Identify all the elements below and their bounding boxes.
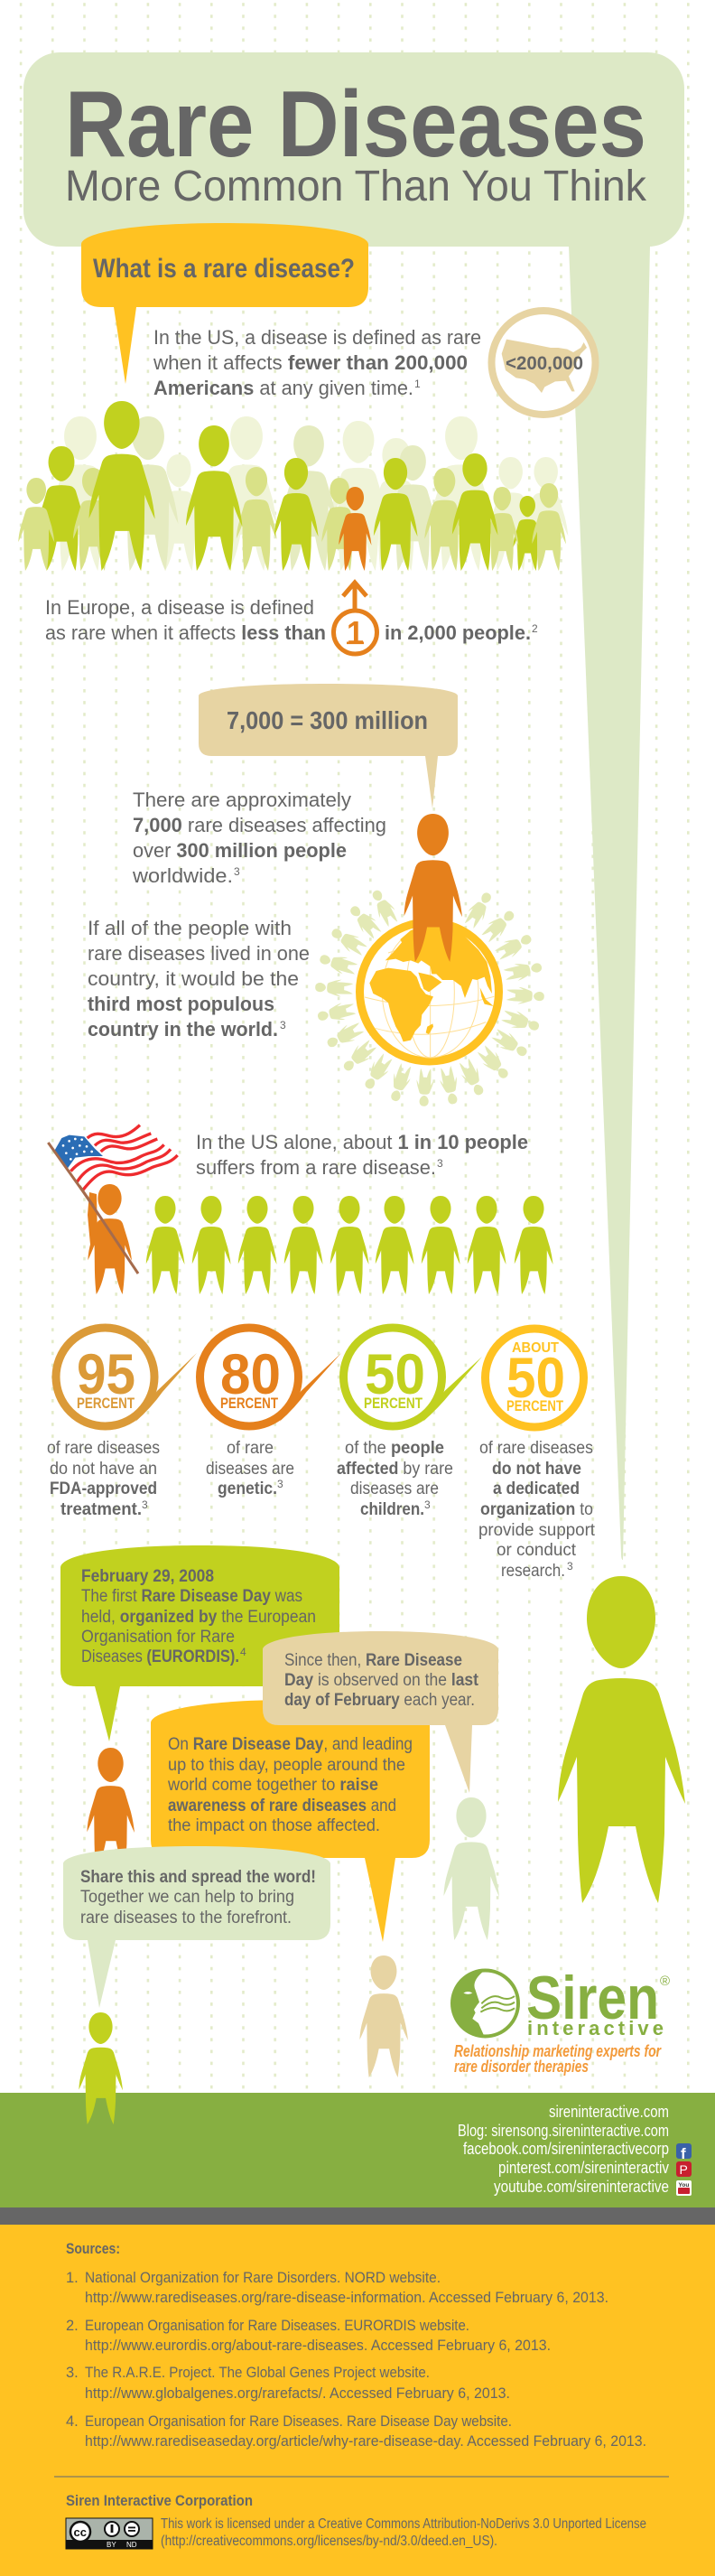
organization name: Siren Interactive Corporation: [66, 2493, 253, 2509]
callout: share this: Together we can help to bring: [80, 1888, 294, 1907]
stat: 50 percent: diseases are: [350, 1479, 439, 1498]
contact links: facebook.com/sireninteractivecorp: [463, 2140, 669, 2158]
callout: share this: [63, 1846, 330, 2008]
logo: Siren Interactive: rare disorder therapies: [454, 2058, 589, 2076]
text: 1 in 10 people: suffers from a rare disease.: [196, 1156, 436, 1179]
text: third most populous country: [88, 917, 310, 1041]
text: third most populous country: If all of the people with: [88, 917, 292, 939]
source list: 4.: [66, 2413, 79, 2430]
stat: 50 percent: of the people: [345, 1439, 444, 1458]
logo: Siren Interactive: interactive: [527, 2017, 664, 2039]
icon: youtube: [676, 2180, 692, 2196]
stat: 95 percent: FDA-approved: [50, 1479, 157, 1498]
icon: light green person: [443, 1797, 499, 1940]
stat: 50 percent: PERCENT: [364, 1395, 422, 1412]
crowd of people with one orange figure: [18, 401, 568, 571]
text: third most populous country: 3: [280, 1019, 286, 1031]
stat: about 50 percent: [478, 1329, 596, 1581]
icon: globe: [359, 922, 498, 1061]
stat: about 50 percent: of rare diseases: [479, 1439, 593, 1458]
subtitle: More Common Than You Think: [65, 163, 647, 210]
source list: http://www.globalgenes.org/rarefacts/. Accessed February 6, 2013.: [85, 2385, 510, 2402]
callout: raising awareness: world come together to raise: [167, 1776, 378, 1795]
text: approximately 7,000 diseases: [132, 789, 386, 887]
text: 1 in 10 people: 3: [437, 1157, 443, 1170]
source list: 1.: [66, 2270, 79, 2286]
text: Europe definition: In Europe, a disease is defined: [45, 596, 314, 619]
callout: share this: rare diseases to the forefront.: [80, 1909, 292, 1927]
text: Europe definition: [45, 596, 538, 644]
icon: arrow pointing to number 1 in circle: [334, 583, 377, 654]
panel: title banner with long speech tail: [23, 52, 684, 1560]
stat: 80 percent: diseases are: [206, 1460, 294, 1479]
text: approximately 7,000 diseases: over 300 million people: [133, 839, 347, 862]
contact links: [458, 2103, 669, 2196]
stat: 95 percent: do not have an: [50, 1460, 157, 1479]
text: approximately 7,000 diseases: 3: [234, 865, 240, 878]
callout: share this: Share this and spread the word!: [80, 1868, 316, 1887]
callout: February 29, 2008: Diseases (EURORDIS).: [81, 1647, 239, 1666]
stat: 80 percent: of rare: [227, 1439, 274, 1458]
text: approximately 7,000 diseases: There are approximately: [133, 789, 351, 811]
callout: what is a rare disease: [81, 223, 368, 384]
source list: http://www.eurordis.org/about-rare-diseases. Accessed February 6, 2013.: [85, 2338, 551, 2354]
source list: European Organisation for Rare Diseases. EURORDIS website.: [85, 2318, 469, 2334]
icon: facebook: f: [681, 2145, 686, 2162]
text: 1 in 10 people: [196, 1131, 528, 1179]
stat: 95 percent: [47, 1328, 197, 1519]
contact links: pinterest.com/sireninteractiv: [498, 2159, 669, 2177]
stat: 95 percent: of rare diseases: [47, 1439, 160, 1458]
icon: orange person under green speech bubble: [87, 1748, 135, 1870]
text: Europe definition: in 2,000 people.: [385, 621, 531, 644]
icon: US map in circle with under 200,000: [491, 311, 596, 415]
source list: European Organisation for Rare Diseases. Rare Disease Day website.: [85, 2413, 512, 2430]
callout: what is a rare disease: What is a rare disease?: [93, 254, 355, 284]
stat: 80 percent: genetic.: [218, 1479, 277, 1498]
logo: Siren Interactive: Relationship marketing experts for: [454, 2042, 662, 2060]
panel: green contact band: [0, 2012, 715, 2207]
callout: since then, Rare Disease Day observed: [263, 1631, 498, 1793]
icon: pinterest: [676, 2161, 692, 2177]
icon: facebook: [676, 2143, 692, 2162]
logo: Siren Interactive: Siren: [526, 1964, 659, 2032]
logo: Siren Interactive: [451, 1964, 670, 2076]
stat: about 50 percent: ABOUT: [512, 1340, 559, 1356]
text: Europe definition: 2: [532, 622, 538, 635]
stat: 80 percent: [200, 1328, 341, 1498]
stat: about 50 percent: 3: [567, 1560, 573, 1573]
text: US definition: In the US, a disease is defined as rare: [153, 326, 481, 349]
icon: tan person: [359, 1955, 408, 2077]
title: Rare Diseases: [65, 72, 646, 177]
callout: 7,000 = 300 million: 7,000 = 300 million: [227, 706, 428, 734]
icon: creative commons badge: [66, 2518, 153, 2549]
icon: creative commons badge: BY: [107, 2541, 116, 2549]
stat: 95 percent: 3: [142, 1498, 148, 1511]
stat: 50 percent: children.: [360, 1500, 424, 1519]
source list: The R.A.R.E. Project. The Global Genes Project website.: [85, 2365, 430, 2381]
contact links: Blog: sirensong.sireninteractive.com: [458, 2122, 669, 2140]
text: Europe definition: as rare when it affects less than: [45, 621, 326, 644]
stat: about 50 percent: provide support: [478, 1521, 596, 1540]
sources heading: Sources:: [66, 2241, 120, 2257]
source list: http://www.rarediseaseday.org/article/why-rare-disease-day. Accessed February 6, 2013.: [85, 2433, 646, 2450]
text: 1 in 10 people: In the US alone, about 1 in 10 people: [196, 1131, 528, 1153]
stat: 80 percent: 80: [220, 1343, 281, 1406]
source list: 3.: [66, 2365, 79, 2381]
ring of people around the globe: [315, 887, 544, 1106]
stat: about 50 percent: 50: [506, 1347, 565, 1410]
callout: February 29, 2008: [60, 1545, 339, 1741]
stat: 95 percent: 95: [77, 1343, 135, 1406]
stat: 50 percent: 50: [365, 1343, 425, 1406]
callout: February 29, 2008: 4: [240, 1646, 246, 1658]
stat: 50 percent: 3: [424, 1498, 431, 1511]
callout: raising awareness: up to this day, people around the: [168, 1756, 405, 1775]
callout: since then, Rare Disease Day observed: Day is observed on the last: [284, 1671, 479, 1690]
license text: (http://creativecommons.org/licenses/by-nd/3.0/deed.en_US).: [161, 2534, 497, 2549]
source list: 2.: [66, 2318, 79, 2334]
stat: 80 percent: 3: [277, 1478, 283, 1490]
callout: raising awareness: On Rare Disease Day, and leading: [168, 1735, 413, 1754]
stat: about 50 percent: PERCENT: [506, 1398, 563, 1414]
grey divider band: [0, 2207, 715, 2225]
panel: sources footer: [0, 2225, 715, 2576]
stat: 80 percent: PERCENT: [220, 1395, 278, 1412]
stat: 95 percent: treatment.: [60, 1500, 142, 1519]
icon: creative commons badge: cc: [74, 2525, 87, 2539]
source list: http://www.rarediseases.org/rare-disease-information. Accessed February 6, 2013.: [85, 2290, 608, 2306]
text: US definition: Americans at any given time.: [153, 377, 413, 399]
callout: since then, Rare Disease Day observed: day of February each year.: [284, 1691, 475, 1710]
stat: about 50 percent: research.: [501, 1562, 565, 1581]
icon: orange person with American flag: [48, 1125, 178, 1294]
callout: February 29, 2008: Organisation for Rare: [81, 1628, 235, 1647]
contact links: youtube.com/sireninteractive: [494, 2178, 669, 2196]
text: third most populous country: country in the world.: [88, 1018, 278, 1041]
stat: about 50 percent: do not have: [492, 1460, 581, 1479]
icon: youtube: You: [679, 2182, 689, 2189]
text: approximately 7,000 diseases: worldwide.: [132, 864, 233, 887]
stat: 95 percent: PERCENT: [77, 1395, 135, 1412]
callout: raising awareness: the impact on those affected.: [168, 1816, 380, 1835]
text: third most populous country: third most populous: [88, 993, 274, 1015]
text: US definition: 1: [414, 378, 421, 390]
icon: creative commons badge: ND: [126, 2541, 137, 2549]
callout: February 29, 2008: February 29, 2008: [81, 1567, 214, 1586]
icon: pinterest: P: [679, 2162, 688, 2177]
callout: since then, Rare Disease Day observed: Since then, Rare Disease: [284, 1651, 462, 1670]
source list: National Organization for Rare Disorders. NORD website.: [85, 2270, 441, 2286]
callout: raising awareness: [151, 1700, 430, 1942]
text: third most populous country: country, it would be the: [88, 967, 299, 990]
stat: about 50 percent: or conduct: [497, 1541, 577, 1560]
stat: 50 percent: affected by rare: [337, 1460, 453, 1479]
text: US definition: when it affects fewer than 200,000: [153, 351, 468, 374]
icon: orange person standing on globe: [404, 814, 462, 962]
callout: 7,000 = 300 million: [199, 684, 458, 808]
stat: about 50 percent: organization to: [480, 1500, 593, 1519]
contact links: sireninteractive.com: [549, 2103, 669, 2121]
icon: green person on band: [79, 2012, 123, 2124]
text: US definition: [153, 326, 481, 399]
icon: US map in circle with under 200,000: <200,000: [506, 353, 583, 374]
icon: arrow pointing to number 1 in circle: 1: [347, 614, 364, 651]
icon: large green person: [558, 1576, 685, 1903]
stat: 50 percent: [337, 1328, 482, 1519]
logo: Siren Interactive: ®: [660, 1974, 670, 1989]
callout: raising awareness: awareness of rare diseases and: [168, 1797, 396, 1815]
row of nine green people: [146, 1196, 553, 1294]
source list: [66, 2270, 646, 2450]
text: third most populous country: rare diseases lived in one: [88, 942, 310, 965]
license text: [161, 2516, 646, 2549]
stat: about 50 percent: a dedicated: [493, 1479, 580, 1498]
callout: February 29, 2008: held, organized by the European: [81, 1608, 316, 1627]
text: approximately 7,000 diseases: 7,000 rare diseases affecting: [133, 814, 386, 836]
license text: This work is licensed under a Creative Commons Attribution-NoDerivs 3.0 Unported License: [161, 2516, 646, 2532]
callout: February 29, 2008: The first Rare Disease Day was: [81, 1587, 302, 1606]
